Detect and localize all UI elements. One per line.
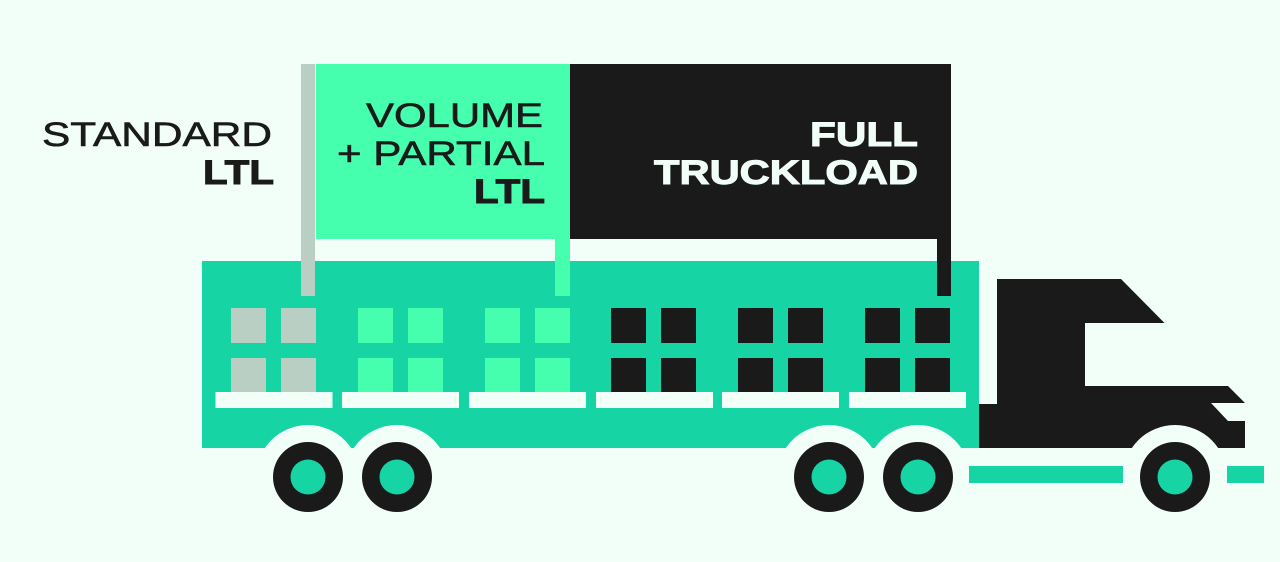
crates: standard LTL	[231, 308, 316, 393]
road line	[969, 466, 1264, 483]
trailer body	[202, 261, 979, 448]
heading: volume + partial LTL: + PARTIAL	[337, 135, 545, 173]
heading: standard LTL	[42, 116, 274, 192]
panel: full truckload	[570, 64, 951, 296]
crates: volume and partial LTL	[358, 308, 570, 393]
heading: full truckload: TRUCKLOAD	[654, 154, 918, 192]
tractor cab	[979, 279, 1245, 448]
heading: volume + partial LTL: LTL	[474, 173, 545, 211]
panel: standard LTL marker	[301, 64, 315, 296]
heading: volume + partial LTL	[337, 97, 545, 211]
wheels	[273, 442, 1210, 512]
heading: standard LTL: LTL	[203, 154, 274, 192]
wheel arches	[256, 425, 1227, 529]
pallets	[216, 392, 966, 408]
heading: volume + partial LTL: VOLUME	[366, 97, 543, 135]
heading: standard LTL: STANDARD	[42, 116, 272, 154]
wheel hubs	[290, 460, 1192, 494]
heading: full truckload: FULL	[810, 116, 918, 154]
heading: full truckload	[654, 116, 918, 192]
crates: full truckload	[611, 308, 950, 393]
panel: volume and partial LTL	[316, 64, 570, 296]
